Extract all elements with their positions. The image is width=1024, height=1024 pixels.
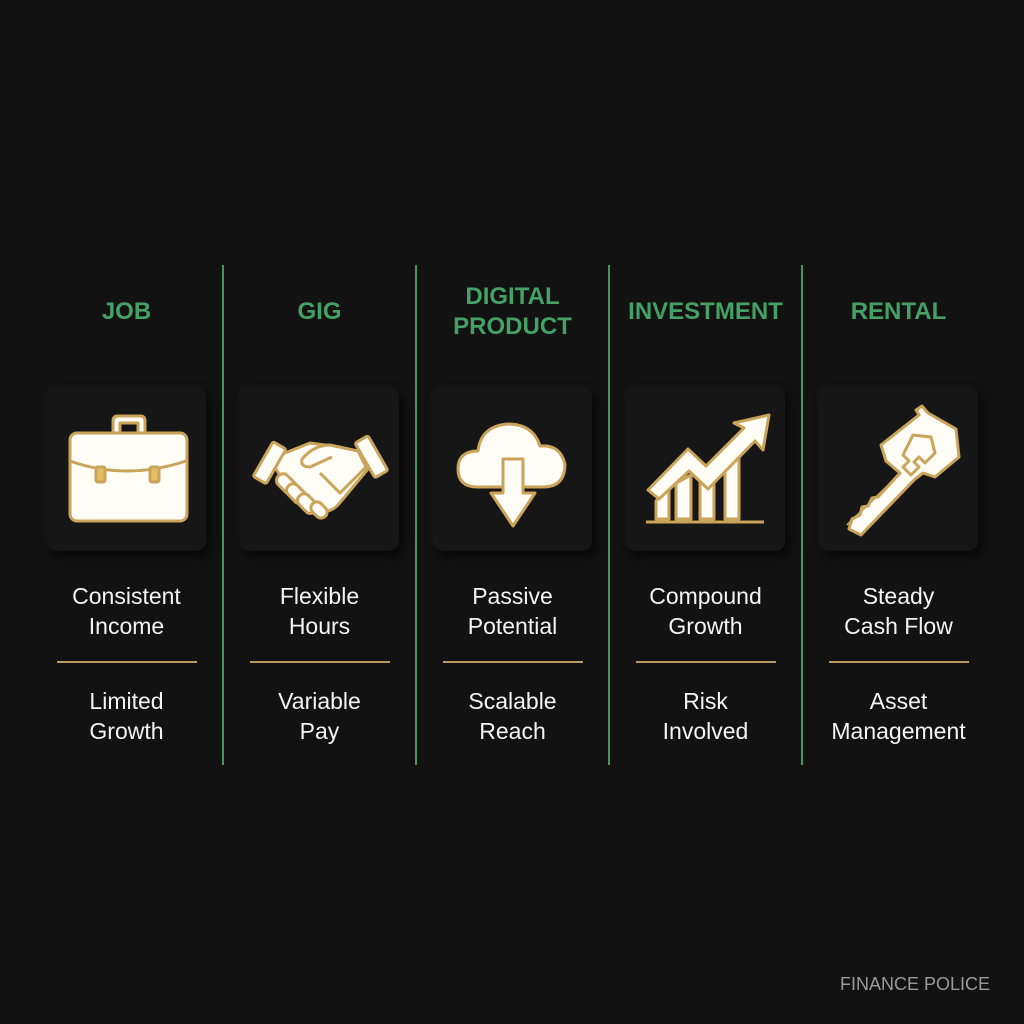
icon: handshake: [240, 387, 399, 551]
heading: investment: INVESTMENT: [628, 298, 783, 325]
text: pro: Hours: [289, 613, 350, 639]
heading: digital product: DIGITAL: [465, 283, 560, 310]
text: pro: [844, 583, 953, 639]
text: pro: Cash Flow: [844, 613, 953, 639]
text: con: [278, 688, 361, 744]
panel: digital product: [443, 283, 593, 744]
text: con: Risk: [683, 688, 728, 714]
text: pro: Potential: [468, 613, 557, 639]
text: pro: [649, 583, 762, 639]
heading: digital product: [453, 283, 572, 340]
text: con: [831, 688, 966, 744]
text: con: Limited: [89, 688, 164, 714]
text: pro: [72, 583, 181, 639]
icon: cloud download: [433, 387, 592, 551]
heading: job: JOB: [102, 298, 151, 325]
heading: digital product: PRODUCT: [453, 313, 572, 340]
text: con: Involved: [663, 718, 748, 744]
text: con: Pay: [300, 718, 339, 744]
text: pro: Income: [89, 613, 164, 639]
text: pro: Passive: [472, 583, 553, 609]
text: con: Reach: [479, 718, 546, 744]
text: con: [663, 688, 748, 744]
text: pro: Flexible: [280, 583, 359, 609]
footer: brand: FINANCE POLICE: [840, 974, 990, 994]
text: pro: Growth: [668, 613, 743, 639]
panel: gig: [250, 298, 400, 744]
text: con: [89, 688, 164, 744]
heading: gig: GIG: [297, 298, 342, 325]
icon: growth chart: [626, 387, 785, 551]
text: pro: Steady: [863, 583, 934, 609]
panel: rental: [829, 298, 979, 744]
heading: rental: RENTAL: [851, 298, 946, 325]
text: con: Growth: [89, 718, 164, 744]
text: pro: Consistent: [72, 583, 181, 609]
text: con: [468, 688, 557, 744]
text: pro: Compound: [649, 583, 762, 609]
icon: briefcase: [47, 387, 206, 551]
text: pro: [280, 583, 359, 639]
panel: job: [57, 298, 207, 744]
text: con: Asset: [870, 688, 927, 714]
text: con: Variable: [278, 688, 361, 714]
text: pro: [468, 583, 557, 639]
icon: house key: [819, 387, 978, 551]
panel: investment: [628, 298, 786, 744]
text: con: Management: [831, 718, 966, 744]
text: con: Scalable: [468, 688, 557, 714]
